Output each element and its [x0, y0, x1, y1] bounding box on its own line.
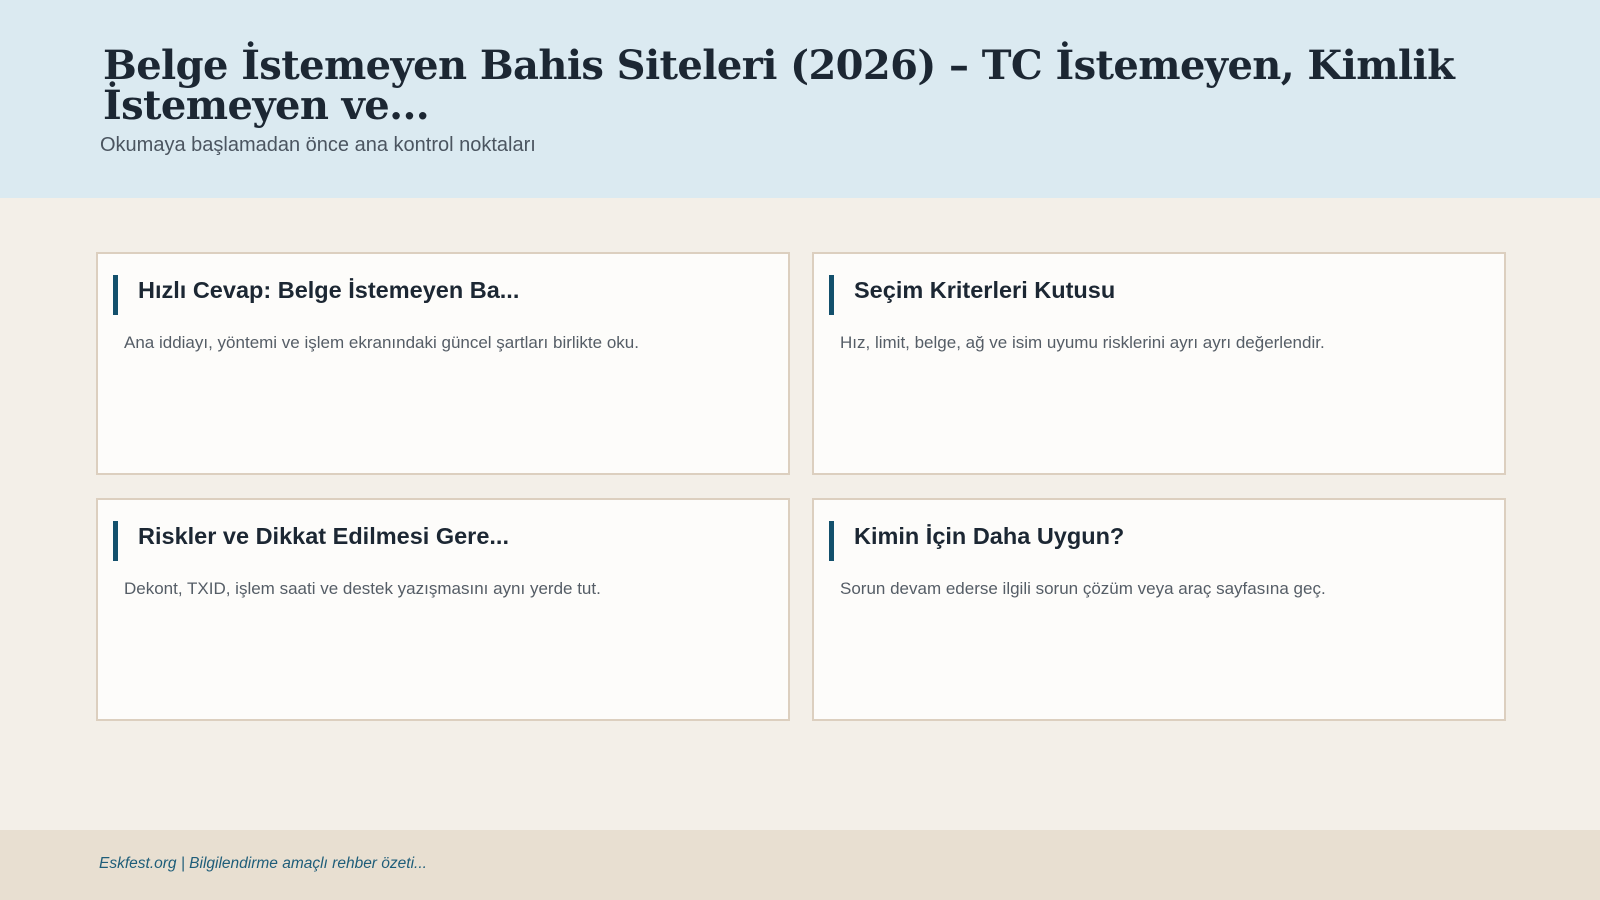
heading: Kimin İçin Daha Uygun?	[854, 523, 1124, 549]
subtitle: Okumaya başlamadan önce ana kontrol noktaları	[100, 134, 536, 156]
text: Sorun devam ederse ilgili sorun çözüm veya araç sayfasına geç.	[840, 579, 1326, 598]
text: Dekont, TXID, işlem saati ve destek yazışmasını aynı yerde tut.	[124, 579, 601, 598]
accent bar	[113, 275, 118, 315]
title: Belge İstemeyen Bahis Siteleri (2026) – TC İstemeyen, Kimlik İstemeyen ve...	[103, 42, 1454, 129]
text: Ana iddiayı, yöntemi ve işlem ekranındaki güncel şartları birlikte oku.	[124, 333, 639, 352]
accent bar	[113, 521, 118, 561]
panel: risks	[96, 498, 790, 721]
accent bar	[829, 275, 834, 315]
panel: quick answer	[96, 252, 790, 475]
heading: Hızlı Cevap: Belge İstemeyen Ba...	[138, 277, 519, 303]
panel: who	[812, 498, 1506, 721]
footer text: Eskfest.org | Bilgilendirme amaçlı rehber özeti...	[99, 855, 427, 872]
footer	[0, 830, 1600, 900]
text: Hız, limit, belge, ağ ve isim uyumu risklerini ayrı ayrı değerlendir.	[840, 333, 1325, 352]
panel: criteria	[812, 252, 1506, 475]
header band	[0, 0, 1600, 198]
heading: Riskler ve Dikkat Edilmesi Gere...	[138, 523, 509, 549]
accent bar	[829, 521, 834, 561]
heading: Seçim Kriterleri Kutusu	[854, 277, 1115, 303]
